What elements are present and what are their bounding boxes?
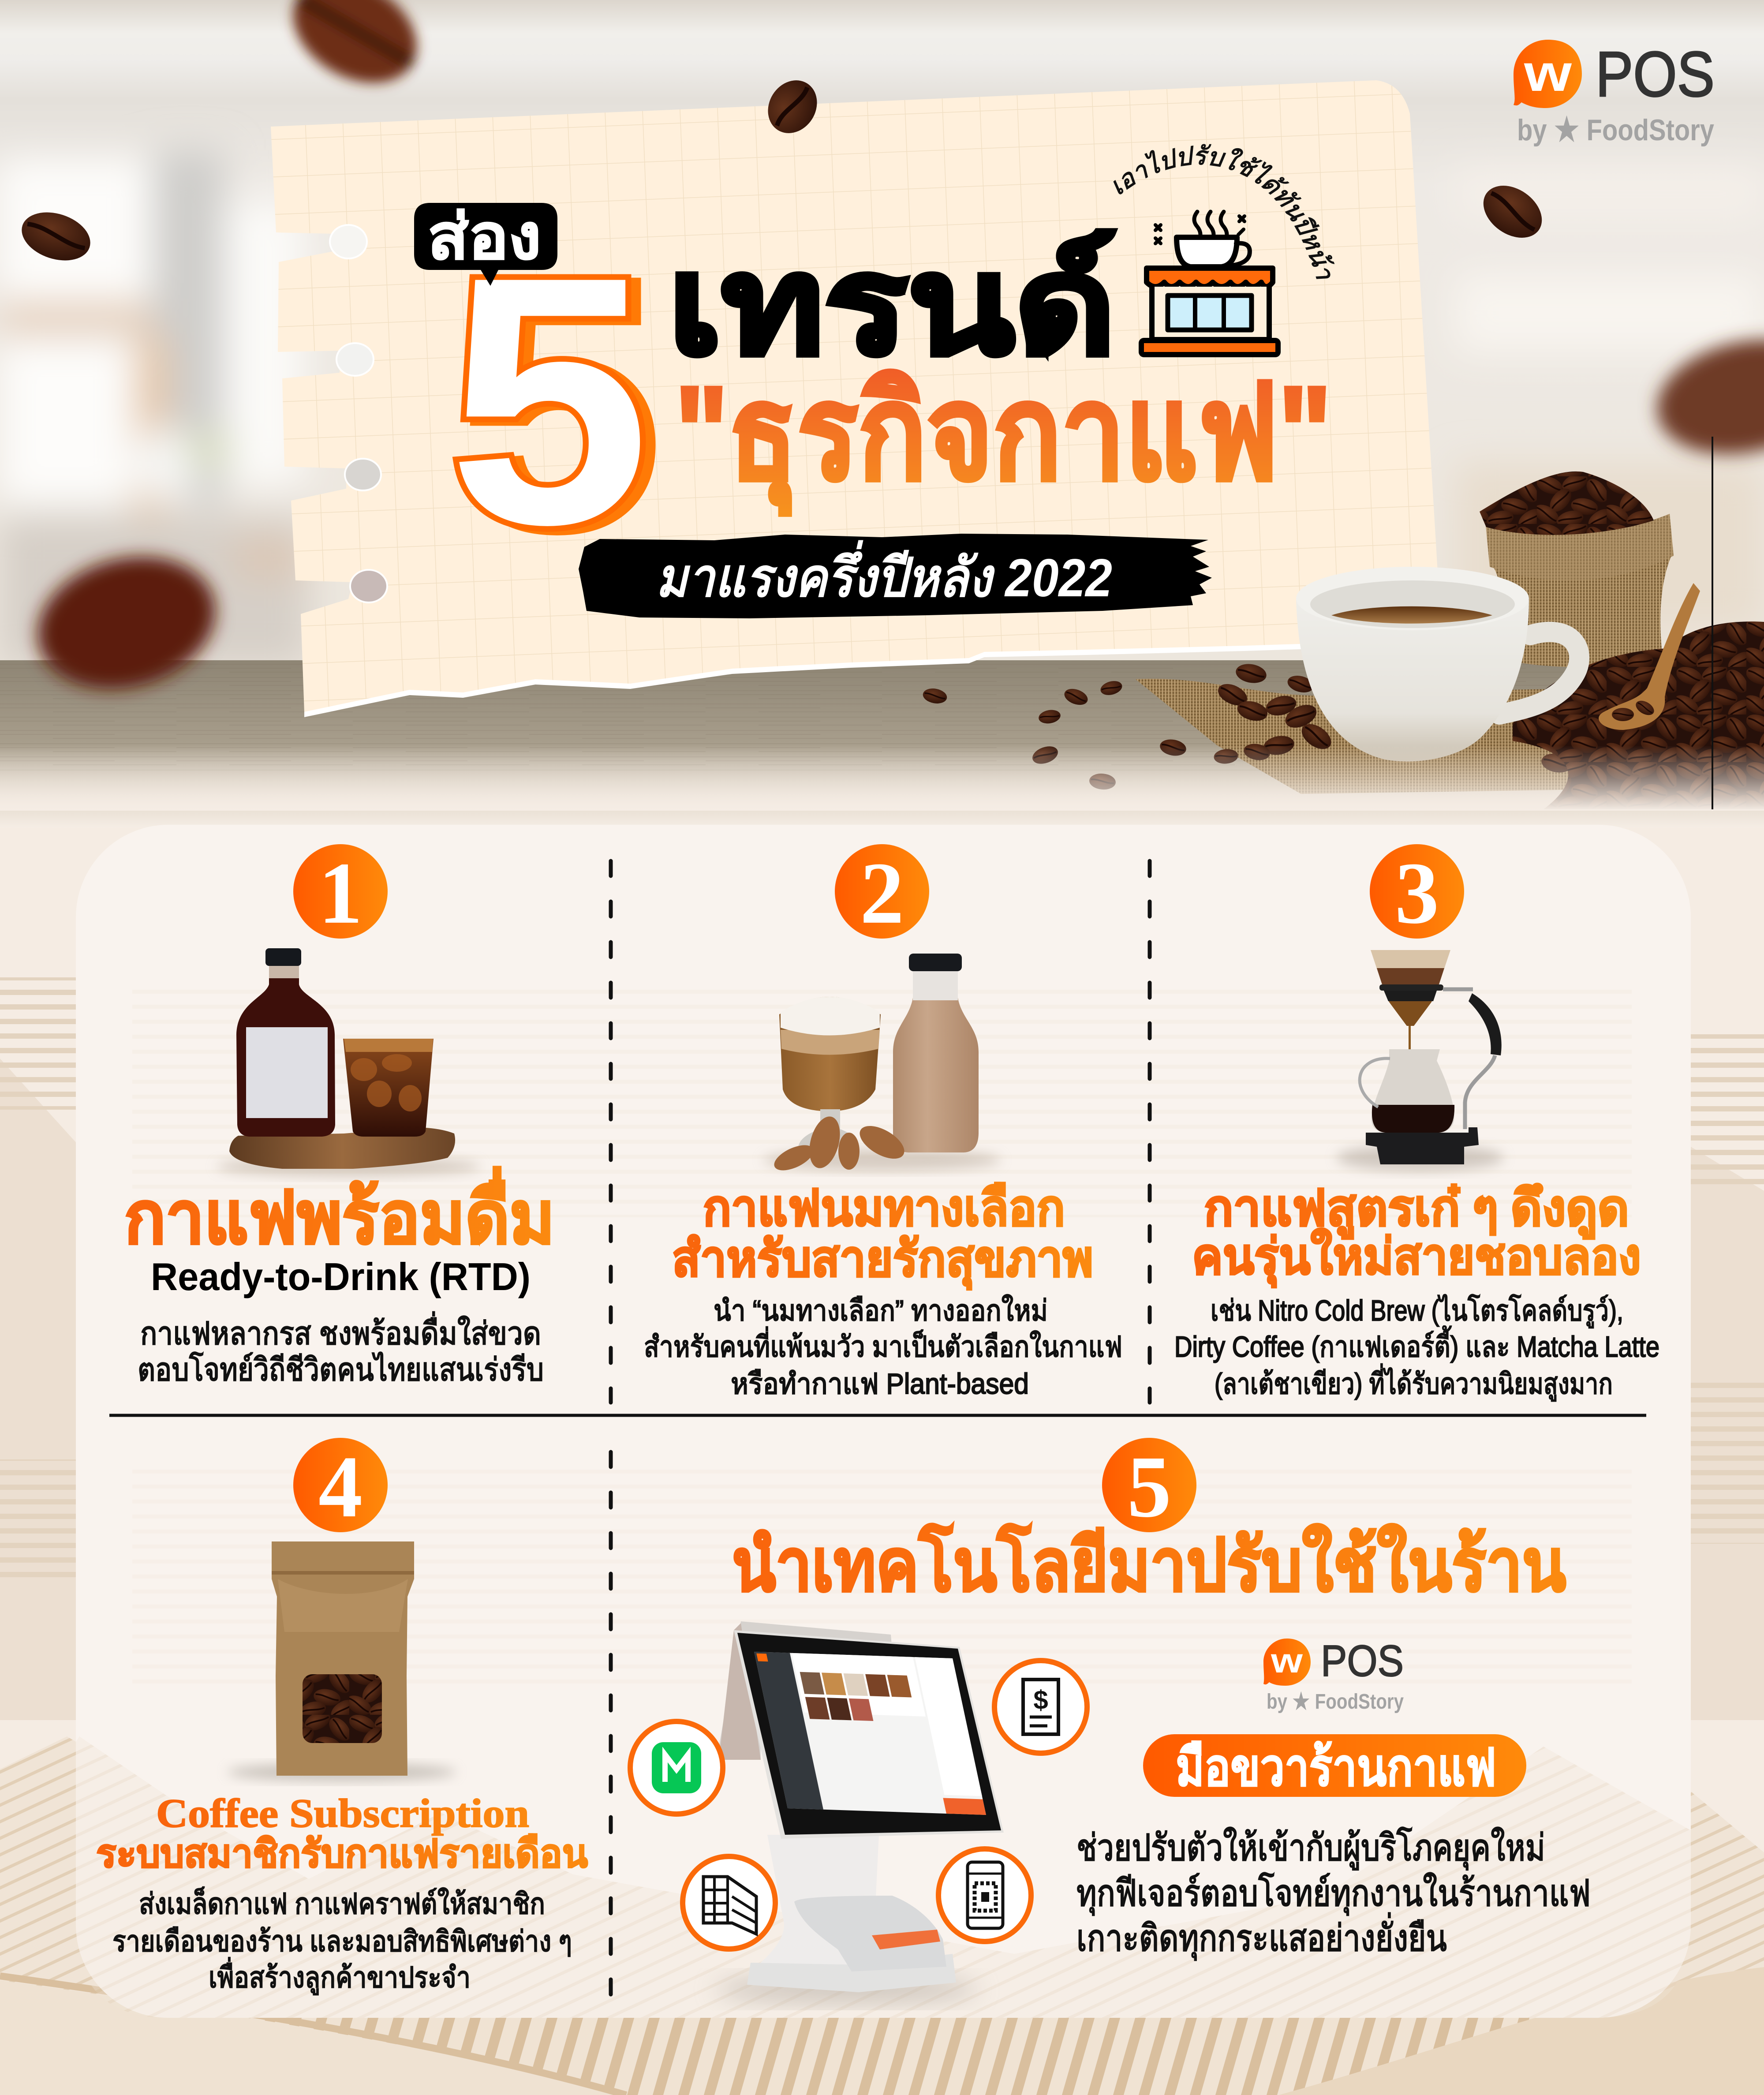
body text: ทุกฟีเจอร์ตอบโจทย์ทุกงานในร้านกาแฟ [1076,1872,1591,1916]
tear hole 4 [350,570,387,602]
icon: coffee shop [1141,212,1278,355]
main content panel [76,825,1691,2018]
body text: ช่วยปรับตัวให้เข้ากับผู้บริโภคยุคใหม่ [1076,1827,1545,1871]
heading: เทรนด์: เทรนด์ [668,229,1116,383]
number badge 5 [1102,1438,1196,1536]
heading [1192,1181,1641,1288]
body text: เกาะติดทุกกระแสอย่างยั่งยืน [1076,1912,1447,1961]
heading: ระบบสมาชิกรับกาแฟรายเดือน [96,1833,588,1876]
number badge 1: 1 [318,845,363,942]
blurred coffee bean: left [22,538,231,708]
heading: Coffee Subscription [156,1791,529,1836]
dividers [109,861,1646,1998]
blurred coffee bean: right [1646,324,1764,470]
body text: นำ “นมทางเลือก” ทางออกใหม่ [714,1294,1048,1327]
body text [138,1312,544,1388]
number badge 1 [293,844,388,942]
coffee surface [1331,606,1492,624]
body text: เช่น Nitro Cold Brew (ไนโตรโคลด์บรูว์), [1211,1294,1623,1328]
base [747,1954,956,1992]
heading [672,1181,1093,1290]
brush banner: มาแรงครึ่งปีหลัง 2022 [656,540,1112,608]
body text [112,1886,572,1995]
speech bubble: ส่อง [414,202,557,286]
coffee bean: left [15,204,97,269]
illustration: bottle and iced glass [216,948,481,1176]
icon: receipt badge [994,1661,1087,1753]
body text: สำหรับคนที่แพ้นมวัว มาเป็นตัวเลือกในกาแฟ [644,1327,1122,1363]
subheading: Ready-to-Drink (RTD) [151,1255,531,1298]
heading: คนรุ่นใหม่สายชอบลอง [1192,1228,1641,1288]
logo: POS by FoodStory [1263,1636,1404,1713]
stand [750,1835,904,1972]
logo mark [1514,40,1582,108]
hero fade [0,745,1764,811]
logo: POS by FoodStory: POS [1321,1636,1404,1686]
body text: ตอบโจทย์วิถีชีวิตคนไทยแสนเร่งรีบ [138,1351,544,1388]
thin vertical line [1712,437,1713,809]
logo: POS by FoodStory [1514,38,1715,147]
big number 5: 5 [448,203,650,598]
pinned coffee bean [758,71,827,142]
heading [96,1791,588,1876]
tear hole 2 [336,343,374,376]
number badge 2 [835,844,929,942]
body text: ส่งเมล็ดกาแฟ กาแฟคราฟต์ให้สมาชิก [139,1886,545,1920]
coffee cup [1296,567,1579,761]
body text [1076,1827,1591,1961]
number badge 3: 3 [1395,845,1439,942]
heading: กาแฟพร้อมดื่ม [124,1167,555,1259]
burlap cloth [1136,679,1720,794]
heading: นำเทคโนโลยีมาปรับใช้ในร้าน [732,1523,1566,1606]
number badge 4: 4 [318,1438,363,1536]
scattered coffee beans [922,662,1573,791]
body text [1174,1294,1659,1402]
body text: กาแฟหลากรส ชงพร้อมดื่มใส่ขวด [140,1312,541,1351]
logo: POS by FoodStory: by ★ FoodStory [1517,113,1714,147]
icon: cup [1177,237,1237,267]
illustration: POS terminal [714,1621,1004,2002]
panel: item 3 trendy coffee recipes [1174,844,1659,1402]
heading: ธุรกิจกาแฟ: "ธุรกิจกาแฟ" [675,359,1332,516]
icon: shop body [1152,287,1269,340]
panel: item 4 subscription [96,1438,588,1995]
icon: steam [1194,212,1227,243]
body text: หรือทำกาแฟ Plant-based [731,1367,1029,1400]
paper note [265,75,1455,723]
speech bubble: ส่อง: ส่อง [428,202,541,272]
logo: POS by FoodStory: w [1524,44,1572,102]
heading: กาแฟสูตรเก๋ ๆ ดึงดูด [1204,1181,1629,1239]
number badge 2: 2 [860,845,904,942]
display UI [754,1652,986,1815]
brush banner [579,534,1212,618]
number badge 3 [1370,844,1464,942]
icon: receipt badge: $ [1033,1685,1048,1715]
illustration: pour-over dripper [1336,950,1504,1171]
icon: LINE MAN badge [630,1721,723,1814]
panel: item 2 plant-based milk [644,844,1122,1400]
illustration: latte glass, milk bottle and almonds [763,954,1001,1175]
receipt printer [794,1896,946,1972]
tear hole 3 [345,459,381,490]
body text [644,1294,1122,1400]
curved tagline: เอาไปปรับใช้ได้ทันปีหน้า [1104,142,1339,284]
illustration: kraft coffee bag [227,1541,456,1781]
blurred coffee bean: top [275,0,435,104]
body text: รายเดือนของร้าน และมอบสิทธิพิเศษต่าง ๆ [112,1925,572,1957]
callout pill: มือขวาร้านกาแฟ [1176,1739,1496,1797]
lower background art [0,977,1764,2095]
body text: Dirty Coffee (กาแฟเดอร์ตี้) และ Matcha Latte [1174,1326,1659,1363]
logo: POS by FoodStory: POS [1596,38,1715,110]
sack rim [1485,514,1674,580]
sack beans [1480,471,1654,535]
icon: awning [1147,268,1273,287]
body text: (ลาเต้ชาเขียว) ที่ได้รับความนิยมสูงมาก [1215,1364,1613,1402]
icon: QR phone badge [938,1849,1031,1942]
heading: กาแฟนมทางเลือก [703,1181,1065,1236]
bean pile [1513,621,1764,809]
panel: item 1 ready-to-drink [124,844,555,1388]
number badge 4 [293,1438,388,1536]
wooden spoon [1599,583,1700,730]
icon: stock shelf badge [683,1856,775,1949]
display frame [734,1630,1004,1839]
rear display [717,1621,892,1760]
heading: สำหรับสายรักสุขภาพ [672,1232,1093,1290]
logo: POS by FoodStory: w [1271,1641,1303,1680]
panel: item 5 technology [630,1438,1591,2002]
coffee sack [1480,471,1674,667]
coffee bean: right [1473,175,1552,248]
body text: เพื่อสร้างลูกค้าขาประจำ [209,1957,471,1995]
logo: POS by FoodStory: by ★ FoodStory [1267,1690,1404,1713]
tear hole 1 [330,225,367,258]
number badge 5: 5 [1127,1438,1171,1536]
